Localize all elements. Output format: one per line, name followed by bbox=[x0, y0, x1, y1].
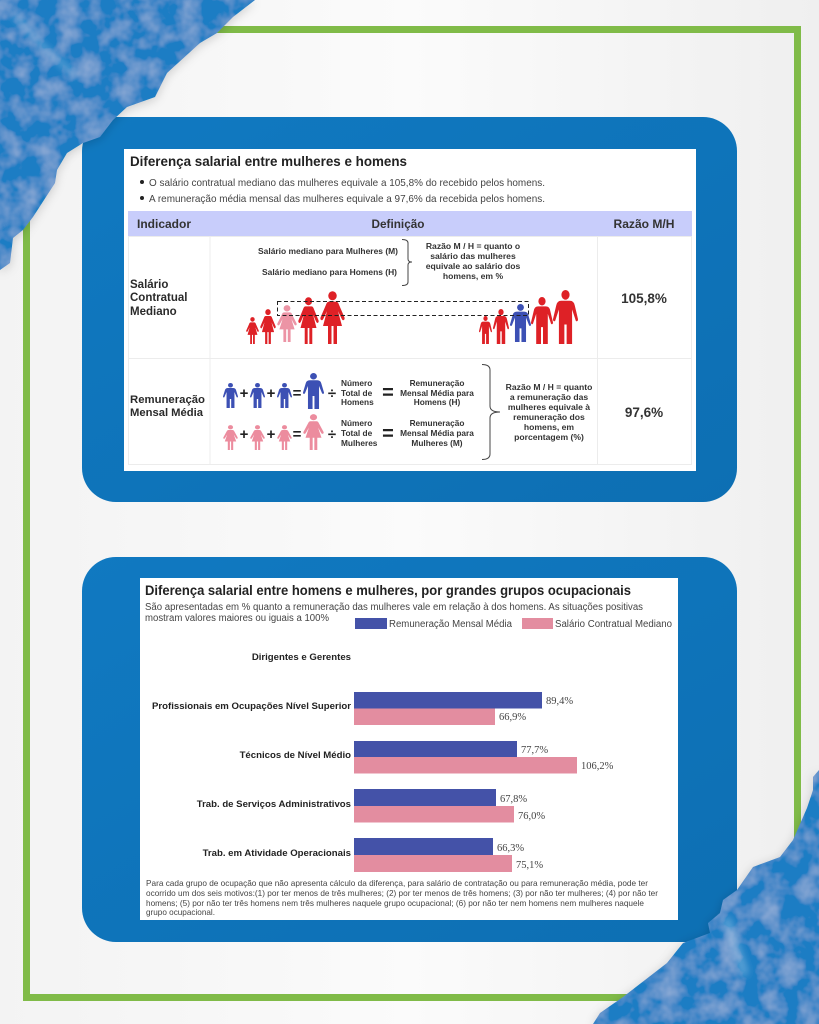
ratio explanation bbox=[506, 382, 592, 442]
ratio explanation: remuneração dos bbox=[513, 412, 585, 422]
footnote: ocorrido um dos seis motivos:(1) por ter menos de três mulheres; (2) por ter menos de três homens; (3) por não ter mulheres; (4) por não ter bbox=[146, 888, 658, 898]
row label: Salário Contratual Mediano: Contratual bbox=[130, 292, 188, 304]
description: mostram valores maiores ou iguais a 100% bbox=[145, 613, 329, 624]
ratio explanation: homens, em % bbox=[443, 271, 503, 281]
total men label bbox=[341, 378, 374, 407]
equals signs: = bbox=[382, 382, 394, 404]
ratio explanation: equivale ao salário dos bbox=[426, 261, 521, 271]
legend: Remuneração Mensal Média bbox=[389, 619, 512, 630]
icon: row of men bbox=[479, 290, 578, 344]
value: 105,8%: 105,8% bbox=[621, 291, 667, 306]
average pay women: Mensal Média para bbox=[400, 428, 474, 438]
footnote bbox=[146, 878, 658, 917]
row label: Remuneração Mensal Média bbox=[130, 394, 205, 419]
average pay women: Remuneração bbox=[410, 418, 464, 428]
table header bbox=[128, 211, 692, 236]
category: Profissionais: 66,9% bbox=[499, 712, 526, 723]
table header: Razão M/H bbox=[614, 217, 674, 231]
decoration: top-left blue torn paper bbox=[0, 0, 255, 270]
category: Técnicos bbox=[240, 741, 614, 774]
ratio explanation: Razão M / H = quanto bbox=[506, 382, 592, 392]
median salary labels: Salário mediano para Mulheres (M) bbox=[258, 246, 398, 256]
icon: men equation bbox=[223, 373, 336, 409]
ratio explanation bbox=[426, 241, 521, 281]
brace bbox=[402, 240, 412, 286]
bullet list: A remuneração média mensal das mulheres equivale a 97,6% da recebida pelos homens. bbox=[149, 193, 545, 205]
legend bbox=[355, 618, 672, 630]
ratio explanation: porcentagem (%) bbox=[514, 432, 584, 442]
decoration: bottom-right blue torn paper bbox=[593, 770, 819, 1024]
equals signs: = bbox=[382, 423, 394, 445]
icon: men equation: + bbox=[240, 385, 249, 402]
median salary labels bbox=[258, 246, 398, 277]
bullet list: O salário contratual mediano das mulheres equivale a 105,8% do recebido pelos homens. bbox=[149, 177, 545, 189]
bullet list bbox=[140, 177, 545, 205]
icon: row of women bbox=[246, 291, 345, 344]
category: Profissionais: 89,4% bbox=[546, 696, 573, 707]
average pay men: Remuneração bbox=[410, 378, 464, 388]
average pay men: Mensal Média para bbox=[400, 388, 474, 398]
category: Técnicos: Técnicos de Nível Médio bbox=[240, 750, 351, 761]
category: Atividade Operacional: Trab. em Atividade Operacionais bbox=[203, 848, 351, 859]
total men label: Total de bbox=[341, 388, 373, 398]
panel: salary difference table bbox=[82, 117, 737, 502]
table header: Definição bbox=[372, 217, 424, 231]
ratio explanation: homens, em bbox=[524, 422, 574, 432]
icon: women equation: + bbox=[240, 426, 249, 443]
category: Profissionais: Profissionais em Ocupações Nível Superior bbox=[152, 701, 351, 712]
large brace bbox=[482, 364, 500, 460]
footnote: homens; (5) por não ter três homens nem três mulheres naquele grupo ocupacional; (6) por não ter nem homens nem mulheres naquele bbox=[146, 898, 644, 908]
panel background bbox=[82, 117, 737, 502]
category: Serviços Administrativos: 76,0% bbox=[518, 811, 545, 822]
total women label bbox=[341, 418, 378, 448]
category: Técnicos: 77,7% bbox=[521, 745, 548, 756]
panel: occupational groups chart bbox=[82, 557, 737, 942]
icon: women equation: + bbox=[267, 426, 276, 443]
total women label: Mulheres bbox=[341, 438, 378, 448]
row label: Remuneração Mensal Média: Mensal Média bbox=[130, 407, 204, 419]
icon: women equation bbox=[223, 414, 336, 450]
average pay men: Homens (H) bbox=[414, 397, 461, 407]
icon: men equation: = bbox=[293, 385, 302, 402]
total women label: Número bbox=[341, 418, 372, 428]
category: Técnicos: 106,2% bbox=[581, 761, 614, 772]
ratio explanation: mulheres equivale à bbox=[508, 402, 590, 412]
icon: men equation: + bbox=[267, 385, 276, 402]
equals signs bbox=[382, 382, 394, 445]
row label: Salário Contratual Mediano: Mediano bbox=[130, 306, 177, 318]
value: 97,6%: 97,6% bbox=[625, 405, 663, 420]
median salary labels: Salário mediano para Homens (H) bbox=[262, 267, 397, 277]
footnote: grupo ocupacional. bbox=[146, 907, 215, 917]
ratio explanation: Razão M / H = quanto o bbox=[426, 241, 520, 251]
category: Atividade Operacional: 66,3% bbox=[497, 843, 524, 854]
row label: Remuneração Mensal Média: Remuneração bbox=[130, 394, 205, 406]
table sheet bbox=[124, 149, 696, 471]
description bbox=[145, 602, 643, 624]
ratio explanation: a remuneração das bbox=[510, 392, 588, 402]
total men label: Número bbox=[341, 378, 372, 388]
icon: women equation: = bbox=[293, 426, 302, 443]
category: Serviços Administrativos bbox=[197, 789, 545, 822]
row label: Salário Contratual Mediano bbox=[130, 279, 188, 318]
category: Serviços Administrativos: Trab. de Serviços Administrativos bbox=[197, 799, 351, 810]
category: Dirigentes e Gerentes: Dirigentes e Gerentes bbox=[252, 652, 351, 663]
average pay women: Mulheres (M) bbox=[411, 438, 463, 448]
total men label: Homens bbox=[341, 397, 374, 407]
heading: Diferença salarial entre homens e mulheres, por grandes grupos ocupacionais bbox=[145, 582, 631, 598]
icon: men equation: ÷ bbox=[328, 385, 336, 402]
category: Atividade Operacional: 75,1% bbox=[516, 860, 543, 871]
category: Profissionais bbox=[152, 692, 573, 725]
chart sheet bbox=[140, 578, 678, 920]
average pay women bbox=[400, 418, 474, 448]
heading: Diferença salarial entre mulheres e homens bbox=[130, 154, 407, 169]
category: Serviços Administrativos: 67,8% bbox=[500, 794, 527, 805]
average pay men bbox=[400, 378, 474, 407]
table header: Indicador bbox=[137, 217, 191, 231]
description: São apresentadas em % quanto a remuneração das mulheres vale em relação à dos homens. As situações positivas bbox=[145, 602, 643, 613]
total women label: Total de bbox=[341, 428, 373, 438]
icon: women equation: ÷ bbox=[328, 426, 336, 443]
legend: Salário Contratual Mediano bbox=[555, 619, 672, 630]
category: Atividade Operacional bbox=[203, 838, 543, 872]
panel background bbox=[82, 557, 737, 942]
footnote: Para cada grupo de ocupação que não apresenta cálculo da diferença, para salário de contratação ou para remuneração média, pode ter bbox=[146, 878, 648, 888]
row label: Salário Contratual Mediano: Salário bbox=[130, 279, 168, 291]
ratio explanation: salário das mulheres bbox=[430, 251, 516, 261]
